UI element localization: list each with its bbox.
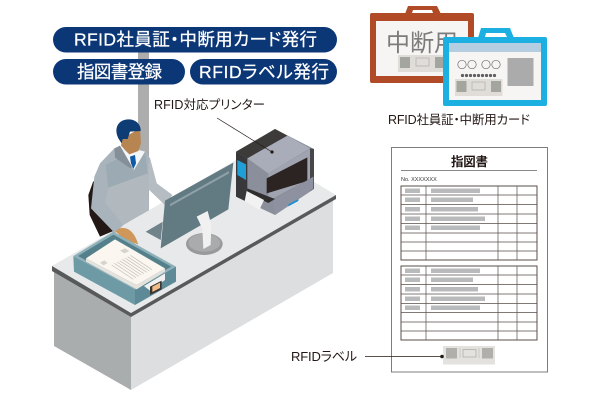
collar bbox=[114, 146, 134, 168]
blue strip bbox=[288, 199, 298, 206]
RFID label callout: RFIDラベル bbox=[291, 349, 357, 364]
RFID chip bbox=[455, 79, 502, 96]
heading pill: card issue: RFID社員証・中断用カード発行 bbox=[74, 30, 317, 50]
table one bbox=[401, 186, 537, 260]
tie bbox=[130, 155, 136, 169]
paper edge bbox=[86, 258, 165, 289]
right dark strip bbox=[310, 148, 314, 191]
tray right side bbox=[135, 267, 176, 305]
screen back bbox=[161, 163, 233, 248]
keyboard bbox=[146, 222, 163, 240]
slot bbox=[247, 188, 275, 203]
pillar bbox=[138, 50, 149, 215]
top panel bbox=[247, 136, 310, 173]
top dark band bbox=[236, 129, 287, 158]
document tray bbox=[73, 232, 176, 305]
display bbox=[237, 160, 246, 180]
printer callout: RFID対応プリンター bbox=[154, 98, 265, 112]
heading pill: label issue bbox=[190, 59, 337, 84]
top paper bbox=[86, 239, 165, 285]
card caption: RFID社員証・中断用カード bbox=[388, 112, 530, 127]
vest upper bbox=[106, 152, 148, 188]
tray left side bbox=[73, 256, 135, 305]
office worker bbox=[88, 119, 172, 244]
name circles bbox=[458, 60, 500, 69]
heading pill: label issue: RFIDラベル発行 bbox=[199, 62, 329, 82]
stamps bbox=[120, 248, 129, 253]
chair bbox=[88, 181, 113, 237]
stand neck bbox=[197, 211, 211, 249]
brown interruption card bbox=[370, 6, 474, 83]
table two bbox=[401, 266, 537, 340]
heading pill: instruction registration: 指図書登録 bbox=[77, 62, 162, 82]
tray floor bbox=[78, 235, 171, 287]
photo bbox=[508, 58, 534, 86]
sheet number: No. XXXXXXX bbox=[401, 177, 437, 183]
sheet title: 指図書 bbox=[451, 154, 488, 169]
RFID label callout bbox=[291, 349, 444, 364]
instruction sheet bbox=[392, 148, 548, 372]
text lines bbox=[112, 255, 152, 279]
blue employee ID card bbox=[443, 28, 547, 106]
body bbox=[236, 129, 314, 215]
tray label bbox=[144, 273, 165, 291]
desk bbox=[52, 148, 336, 390]
heading pill: card issue bbox=[53, 27, 337, 52]
shirt bbox=[120, 146, 145, 170]
stand base bbox=[186, 233, 223, 255]
lower right face bbox=[273, 177, 313, 215]
tray rim bbox=[73, 232, 176, 289]
body and arms bbox=[91, 148, 172, 233]
hand bbox=[116, 228, 138, 244]
heading pill: instruction registration bbox=[53, 59, 185, 84]
brown interruption card: 中断用 bbox=[386, 30, 458, 57]
right arm shade bbox=[148, 158, 172, 205]
hair bbox=[116, 119, 141, 143]
number dots bbox=[461, 74, 496, 77]
printer bbox=[236, 129, 314, 215]
printer callout bbox=[154, 98, 274, 154]
neck and face bbox=[121, 128, 141, 154]
right face bbox=[268, 149, 310, 201]
paper bbox=[245, 191, 264, 210]
left dark strip bbox=[236, 152, 247, 201]
RFID chip bbox=[398, 55, 448, 72]
RFID label chip bbox=[443, 346, 495, 364]
lower torso bbox=[105, 173, 149, 225]
right window bbox=[267, 157, 307, 193]
monitor bbox=[161, 163, 233, 255]
